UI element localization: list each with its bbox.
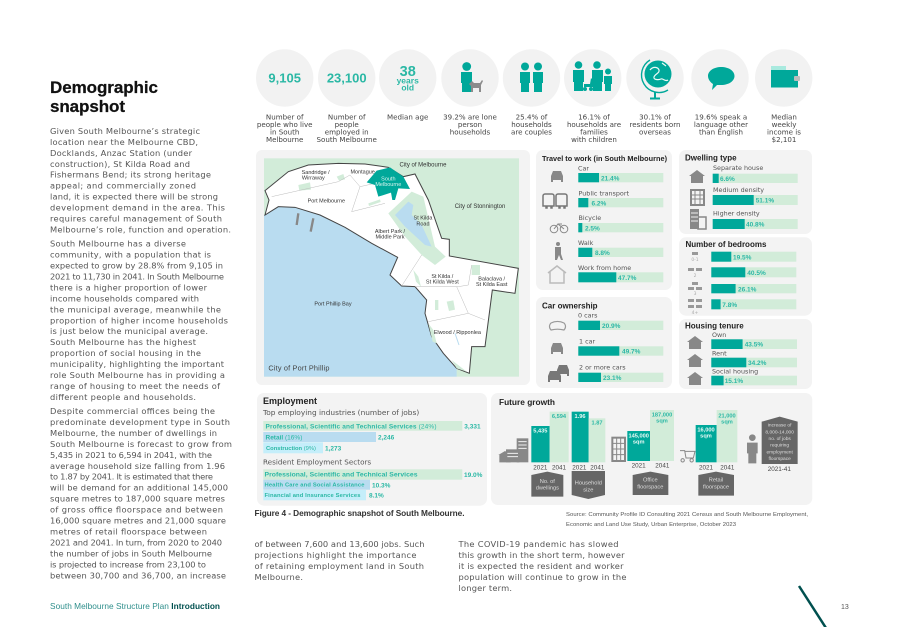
row: higher density: 40.8% [746, 222, 765, 229]
tag: jobs increase: requiring [770, 443, 789, 449]
row: bicycle: 2.5% [585, 225, 600, 232]
stat: couples [503, 49, 560, 136]
left column body text: requires careful management of South [50, 214, 222, 224]
year labels: 2041 [590, 464, 605, 471]
panel: map of City of Port Phillip [256, 150, 530, 385]
tag: retail floorspace [698, 472, 734, 496]
left column body text: between 30,700 and 36,700, an increase [50, 570, 226, 580]
bars: dwellings: 6,594 [552, 414, 567, 420]
map labels: Melbourne [375, 182, 401, 188]
row: 4+ bedrooms: 4+ [692, 310, 699, 316]
panel: number of bedrooms [679, 237, 812, 316]
tag: office floorspace: Office [643, 477, 658, 483]
column 3 text: population will continue to grow in the [458, 572, 626, 582]
map labels: Port Phillip Bay [314, 302, 352, 308]
left column body text: appeal; and commercially zoned [50, 181, 196, 191]
source note [566, 512, 808, 528]
row: car [551, 164, 663, 182]
icon: office building [612, 438, 625, 461]
stat: lone person households: 39.2% are lone [443, 112, 497, 122]
column 3 text [458, 539, 626, 593]
column 2 text: projections highlight the importance [254, 550, 416, 560]
row: rent: 34.2% [748, 360, 767, 367]
stat: born overseas: 30.1% of [639, 112, 671, 122]
bars: retail floorspace: 16,000 [697, 427, 715, 433]
stat: median age: 38 [400, 64, 416, 80]
stat: residents: in South [270, 128, 299, 136]
bars: household size [572, 412, 605, 462]
stat: born overseas: overseas [639, 128, 671, 136]
bars: retail floorspace: sqm [700, 434, 712, 440]
bars: office floorspace: sqm [656, 419, 668, 425]
year labels: 2021 [699, 464, 714, 471]
row: separate house: 6.6% [720, 176, 735, 183]
left column body text: will be demand for an additional 145,000 [50, 483, 228, 493]
stat: employed [317, 49, 377, 144]
row: 3 bedrooms: 3 [694, 291, 697, 297]
footer: South Melbourne Structure Plan Introduction [50, 601, 220, 611]
row: medium density: 51.1% [756, 198, 774, 205]
map labels: Port Melbourne [308, 198, 345, 204]
title: snapshot [50, 97, 125, 116]
left column body text: community, with a population that is [50, 250, 211, 260]
map labels: St Kilda West [426, 280, 459, 286]
left column body text: range of housing to meet the needs of [50, 381, 221, 391]
row: 1 car [551, 338, 663, 356]
panel: employment: Resident Employment Sectors [263, 458, 371, 466]
stat: residents: people who live [257, 120, 313, 129]
bars: retail floorspace: 21,000 [718, 413, 736, 419]
row: separate house [689, 164, 798, 183]
left column body text: to 1.87 by 2041. It is estimated that there [50, 472, 213, 482]
left column body text: of gross office floorspace and between [50, 505, 223, 515]
left column body text: municipality, highlighting the important [50, 359, 225, 369]
row: rent [687, 350, 797, 367]
column 2 text: of retaining employment land in South [254, 561, 424, 571]
row: 2 or more cars [548, 364, 663, 382]
left column body text: there is a higher proportion of lower [50, 282, 208, 292]
bar chart: resident employment sectors [263, 469, 483, 500]
bar chart: resident employment sectors: Financial and Insurance Services [264, 493, 360, 499]
left column body text: is projected to increase from 23,100 to [50, 559, 206, 569]
stat: weekly income: weekly [772, 120, 796, 129]
bars: dwellings: 5,435 [533, 428, 547, 434]
row: higher density [690, 209, 798, 229]
panel: dwelling type [679, 150, 812, 234]
stat: other language: than English [699, 128, 743, 136]
corner accent line [799, 586, 826, 627]
left column body text: metres of retail floorspace between [50, 526, 207, 536]
tag: no. of dwellings [531, 472, 563, 497]
panel: housing tenure [679, 319, 812, 389]
map labels [268, 163, 508, 373]
stat: other language [691, 49, 749, 136]
tag: retail floorspace: floorspace [703, 485, 729, 491]
tag: jobs increase: increase of [768, 423, 792, 429]
row: bicycle [550, 214, 663, 233]
row: 4+ bedrooms [688, 299, 796, 316]
column 2 text [254, 539, 424, 582]
bars: office floorspace [627, 410, 674, 461]
stat: lone person households: households [450, 128, 490, 136]
bar chart: top employing industries: Retail (16%) [266, 434, 302, 442]
row: separate house: Separate house [713, 164, 763, 172]
left column body text: role South Melbourne has in providing a [50, 370, 225, 380]
column 3 text: The COVID-19 pandemic has slowed [458, 539, 618, 549]
map labels: St Kilda [414, 216, 433, 222]
stat: weekly income: $2,101 [772, 135, 796, 144]
left column body text: the municipal average, meanwhile the [50, 304, 221, 314]
left column body text: South Melbourne has a diverse [50, 239, 186, 249]
panel: future growth [491, 393, 812, 505]
stat: employed: South Melbourne [317, 135, 377, 144]
year labels: 2041 [552, 464, 567, 471]
source note: Economic and Land Use Study, Urban Enterprise, October 2023 [566, 522, 737, 528]
left column body text: predominate development type in South [50, 417, 230, 427]
tag: no. of dwellings: dwellings [536, 486, 559, 492]
tag: retail floorspace: Retail [709, 477, 723, 483]
row: bicycle: Bicycle [578, 214, 601, 222]
bar chart: top employing industries: Construction (9%) [266, 446, 316, 452]
left column body text: location near the Melbourne CBD, [50, 137, 198, 147]
row: 2 bedrooms: 2 [694, 273, 697, 279]
row: public transport: Public transport [578, 190, 629, 198]
row: walk: Walk [578, 239, 594, 247]
left column body text: Melbourne, the number of dwellings in [50, 428, 217, 438]
tag: jobs increase: no. of jobs [769, 436, 791, 442]
map labels: City of Port Phillip [268, 364, 330, 373]
left column body text: 2021 and 2041. In turn, from 2020 to 2040 [50, 537, 222, 547]
row: walk: 8.8% [595, 250, 610, 257]
icon: buildings [498, 438, 528, 462]
stat: born overseas: residents born [629, 120, 681, 129]
bars: household size: 1.96 [574, 414, 586, 420]
bars: retail floorspace [696, 410, 737, 462]
tag: jobs increase: 2021-41 [768, 466, 791, 473]
left column body text: the number of jobs in South Melbourne [50, 548, 212, 558]
map labels: South [381, 176, 396, 182]
tag: office floorspace: floorspace [637, 484, 663, 490]
stat: families: households are [567, 120, 621, 129]
left column body text: South Melbourne is forecast to grow from [50, 439, 232, 449]
bar chart: resident employment sectors: Health Care and Social Assistance [264, 483, 365, 489]
tag: household size: Household [575, 481, 602, 487]
row: social housing: 15.1% [725, 378, 743, 385]
tag: jobs increase: employment [767, 449, 793, 455]
row: walk [555, 239, 663, 260]
tag: office floorspace [633, 472, 668, 495]
page number: 13 [841, 604, 849, 611]
stat: employed: employed in [325, 128, 369, 136]
bar chart: resident employment sectors: 8.1% [369, 492, 384, 500]
stat: employed: 23,100 [327, 70, 367, 86]
left column body text: proportion of higher income households [50, 315, 228, 325]
year labels: 2041 [720, 464, 735, 471]
stat: employed: people [335, 120, 359, 129]
row: public transport [543, 190, 663, 208]
tag: jobs increase: 8,000-14,000 [765, 429, 794, 435]
source note: Source: Community Profile ID Consulting 2021 Census and South Melbourne Employment, [566, 512, 808, 518]
row: 2 or more cars: 23.1% [603, 375, 622, 382]
row: 3 bedrooms [688, 282, 796, 297]
stat: families: 16.1% of [578, 112, 610, 122]
stat: residents: Melbourne [266, 135, 303, 144]
left column body text: proportion of social housing in the [50, 348, 201, 358]
stat: median age: years [397, 76, 419, 86]
stat: employed: Number of [328, 112, 366, 122]
tag: no. of dwellings: No. of [540, 479, 555, 485]
row: 0 cars: 0 cars [578, 312, 598, 320]
column 3 text: longer term. [458, 583, 512, 593]
bar chart: resident employment sectors: Professional, Scientific and Technical Services [264, 472, 418, 479]
stat: other language: 19.6% speak a [695, 112, 747, 122]
map labels: City of Melbourne [400, 163, 447, 169]
column 3 text: this growth in the short term, however [458, 550, 625, 560]
left column body text: Despite commercial offices being the [50, 406, 215, 416]
tag: jobs increase: floorspace [769, 456, 791, 462]
bars: office floorspace: 145,000 [628, 433, 649, 439]
title: Demographic [50, 78, 158, 97]
map labels: Albert Park / [375, 229, 406, 235]
bar chart: top employing industries: 2,246 [378, 434, 395, 442]
panel: employment [257, 393, 487, 506]
left column body text: is just below the municipal average. [50, 326, 208, 336]
stat: median age: Median age [387, 112, 428, 122]
year labels: 2021 [533, 464, 548, 471]
bar chart: resident employment sectors: 19.0% [464, 472, 483, 479]
icon: shopping trolley [680, 451, 695, 462]
row: car: 21.4% [601, 175, 620, 182]
bars: retail floorspace: sqm [721, 420, 733, 426]
stat: median age [379, 49, 436, 121]
year labels: 2021 [572, 464, 587, 471]
left column body text: expected to grow by 28.8% from 9,105 in [50, 260, 223, 270]
year labels: 2041 [655, 463, 670, 470]
stat: lone person households: person [458, 120, 482, 129]
row: medium density [691, 186, 798, 205]
row: higher density: Higher density [713, 210, 760, 218]
panel: number of bedrooms: Number of bedrooms [686, 240, 767, 249]
row: work from home [548, 264, 663, 283]
stat: couples: 25.4% of [516, 112, 548, 122]
column 3 text: it is expected the resident and worker [458, 561, 624, 571]
icon: person [747, 434, 758, 463]
stat: residents: 9,105 [268, 70, 301, 86]
row: 0-1 bedroom [691, 252, 796, 263]
panel: employment: Employment [263, 396, 317, 406]
left column body text: Docklands, Anzac Station (under [50, 148, 193, 158]
left column body text: Given South Melbourne’s strategic [50, 126, 200, 136]
row: social housing [687, 368, 797, 385]
row: own: Own [712, 331, 726, 339]
left column body text: 5,435 in 2021 to 6,594 in 2041, with the [50, 450, 212, 460]
stat: lone person households [441, 49, 499, 136]
column 2 text: of between 7,600 and 13,600 jobs. Such [254, 539, 424, 549]
stat: weekly income: Median [771, 112, 797, 122]
bars: household size: 1.87 [591, 420, 603, 426]
row: own: 43.5% [745, 342, 763, 349]
tag: jobs increase [762, 417, 798, 473]
map labels: St Kilda East [476, 282, 508, 288]
column 2 text: Melbourne. [254, 572, 303, 582]
map labels: City of Stonnington [455, 204, 505, 210]
row: work from home: 47.7% [618, 275, 637, 282]
bars: office floorspace: sqm [633, 440, 644, 446]
stat: couples: are couples [511, 128, 552, 136]
left column body text [50, 126, 232, 580]
map labels: Wirraway [302, 176, 325, 182]
row: rent: Rent [712, 350, 727, 358]
stat: median age: old [401, 82, 414, 92]
panel: housing tenure: Housing tenure [685, 322, 744, 330]
figure caption: Figure 4 - Demographic snapshot of South Melbourne. [254, 508, 464, 518]
bar chart: top employing industries: Professional, Scientific and Technical Services (24%) [266, 423, 436, 430]
tag: household size [572, 471, 605, 499]
stat: other language: language other [694, 120, 748, 129]
left column body text: square metres to 187,000 square metres [50, 494, 225, 504]
row: 1 car: 1 car [579, 338, 596, 346]
map labels: Middle Park [376, 235, 405, 241]
map labels: Balaclava / [478, 276, 506, 282]
row: car: Car [578, 164, 589, 172]
row: 4+ bedrooms: 7.8% [722, 302, 737, 309]
row: own [687, 331, 797, 349]
left column body text: different people and households. [50, 392, 196, 402]
row: social housing: Social housing [712, 368, 758, 376]
left column body text: construction), St Kilda Road and [50, 159, 190, 169]
panel: car ownership: Car ownership [542, 302, 598, 310]
left column body text: Melbourne’s role, function and operation. [50, 224, 231, 234]
map labels: Montague [350, 169, 375, 175]
panel: travel to work [536, 150, 672, 290]
title [50, 78, 158, 116]
stat: families [564, 49, 621, 144]
left column body text: South Melbourne has the highest [50, 337, 197, 347]
bar chart: top employing industries [263, 421, 481, 453]
stat: residents [256, 49, 313, 144]
stat: weekly income: income is [767, 128, 801, 136]
year labels: 2021 [632, 463, 646, 470]
stat circles row [256, 49, 812, 144]
row: work from home: Work from home [578, 264, 631, 272]
stat: families: families [580, 128, 608, 136]
stat: couples: households [511, 120, 552, 129]
bar chart: top employing industries: 1,273 [325, 445, 342, 452]
row: 2 bedrooms: 40.5% [747, 270, 766, 277]
left column body text: 2021 to 11,730 in 2041. In South Melbourne [50, 272, 224, 282]
row: public transport: 6.2% [592, 200, 607, 207]
stat: born overseas [626, 49, 684, 136]
year labels [533, 463, 735, 471]
row: 0-1 bedroom: 19.5% [733, 254, 752, 261]
left column body text: land, it is expected there will be strong [50, 192, 218, 202]
map labels: Sandridge / [302, 170, 330, 176]
map labels: Elwood / Ripponlea [434, 330, 482, 336]
bars: dwellings [531, 412, 569, 462]
left column body text: Fishermans Bend; its strong heritage [50, 170, 211, 180]
map labels: St Kilda / [431, 274, 454, 280]
panel: travel to work: Travel to work (in South Melbourne) [542, 154, 668, 163]
map labels: Road [416, 221, 430, 227]
stat: residents: Number of [266, 112, 304, 122]
row: 2 or more cars: 2 or more cars [579, 364, 626, 372]
row: 0 cars: 20.9% [602, 323, 621, 330]
panel: car ownership [536, 297, 672, 388]
left column body text: 16,000 square metres and 21,000 square [50, 516, 226, 526]
highlighted precinct: South Melbourne [367, 167, 410, 200]
stat: families: with children [571, 135, 617, 144]
row: 0 cars [550, 312, 663, 330]
panel: employment: Top employing industries (number of jobs) [262, 408, 419, 417]
row: medium density: Medium density [713, 186, 764, 194]
left column body text: average household size falling from 1.96 [50, 461, 225, 471]
row: 2 bedrooms [688, 267, 796, 279]
left column body text: income households compared with [50, 293, 199, 303]
bar chart: resident employment sectors: 10.3% [372, 482, 391, 489]
stat: weekly income [755, 49, 812, 144]
tag: household size: size [583, 487, 593, 493]
left column body text: development demand in the area. This [50, 202, 225, 212]
row: 1 car: 49.7% [622, 349, 641, 356]
bars: office floorspace: 187,000 [652, 413, 672, 419]
row: 0-1 bedroom: 0-1 [691, 257, 699, 263]
panel: future growth: Future growth [499, 397, 555, 407]
panel: dwelling type: Dwelling type [685, 154, 737, 162]
row: 3 bedrooms: 26.1% [738, 286, 757, 293]
bar chart: top employing industries: 3,331 [464, 423, 481, 430]
